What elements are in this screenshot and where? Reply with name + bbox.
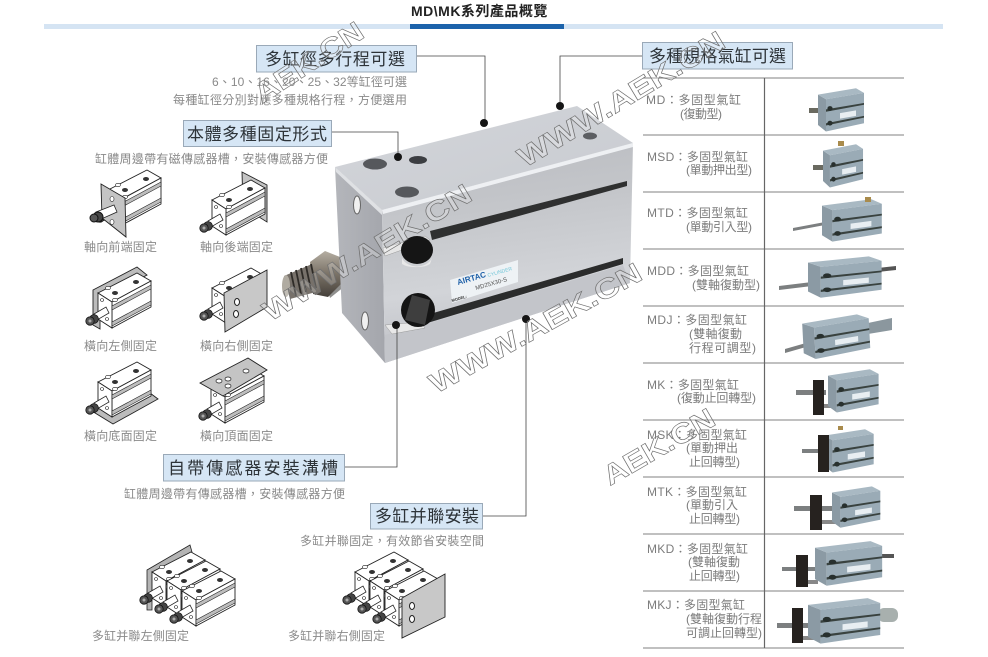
row: MKJ: 可調止回轉型): [686, 626, 762, 640]
row: MDD: MDD：多固型氣缸: [647, 263, 749, 278]
watermark: WWW.AEK.CN upper right: WWW.AEK.CN: [512, 25, 730, 173]
row: MD: (復動型): [680, 107, 722, 121]
row: MSK: 止回轉型): [689, 455, 740, 469]
mount: lateral right: [200, 268, 273, 353]
mount: parallel left: 多缸并聯左側固定: [92, 628, 189, 643]
text: bore sizes: 每種缸徑分別對應多種規格行程，方便選用: [173, 92, 407, 107]
row: MD: MD：多固型氣缸: [646, 92, 741, 107]
row: MKD: [647, 541, 894, 587]
row: MTD: (單動引入型): [686, 220, 752, 234]
callout: parallel mounting: 多缸并聯安裝: [375, 506, 479, 526]
header: title and rule: [44, 3, 943, 29]
callout: parallel mounting: [370, 315, 530, 529]
mount: axial rear: [200, 172, 273, 254]
ports on top: [354, 132, 597, 330]
mount: axial front: [84, 170, 161, 254]
row: MKD: MKD：多固型氣缸: [647, 541, 748, 556]
callout: sensor grooves: [164, 321, 400, 481]
row: MDJ: (雙軸復動: [689, 327, 742, 341]
row: MSK: MSK：多固型氣缸: [647, 427, 747, 442]
row: MSK: (單動押出: [686, 441, 738, 455]
row: MDJ: 行程可調型): [689, 341, 756, 355]
row: MTK: 止回轉型): [689, 512, 740, 526]
callout: multiple specifications: [556, 42, 792, 110]
row: MKJ: MKJ：多固型氣缸: [647, 597, 745, 612]
callout: multi bore and stroke: [256, 46, 488, 127]
cylinder body: [335, 167, 385, 363]
row: MSK: [647, 426, 874, 472]
callout: mounting forms: 本體多種固定形式: [187, 125, 327, 144]
watermark: WWW.AEK.CN center left: WWW.AEK.CN: [257, 178, 477, 327]
model nameplate: AIRTAC: [456, 270, 487, 287]
mount: lateral bottom: 橫向底面固定: [84, 428, 157, 443]
watermark: WWW.AEK.CN lower: WWW.AEK.CN: [424, 257, 647, 399]
row: MTK: (單動引入: [686, 498, 738, 512]
callout: mounting forms: [184, 120, 402, 161]
mount: parallel left: [92, 545, 235, 643]
row: MSD: [647, 141, 863, 187]
rod and fitting: [282, 245, 372, 299]
callout: multi bore and stroke: 多缸徑多行程可選: [265, 49, 405, 69]
mount: lateral top: 橫向頂面固定: [200, 428, 273, 443]
row: MKD: 止回轉型): [689, 569, 740, 583]
mount: parallel right: [288, 552, 445, 643]
text: sensor description: 缸體周邊帶有傳感器槽，安裝傳感器方便: [124, 486, 345, 501]
model nameplate: MODEL:: [451, 294, 467, 303]
watermark: AEK.CN lower right: AEK.CN: [598, 402, 720, 491]
row: MKJ: [647, 597, 898, 644]
text: parallel description: 多缸并聯固定，有效節省安裝空間: [300, 533, 484, 548]
row: MDD: (雙軸復動型): [692, 278, 760, 292]
mount: lateral left: 橫向左側固定: [84, 338, 157, 353]
product table: [643, 78, 904, 648]
model nameplate: MD25X30-S: [475, 277, 508, 292]
callout: multiple specifications: 多種規格氣缸可選: [649, 46, 786, 66]
row: MTD: MTD：多固型氣缸: [647, 205, 748, 220]
row: MDJ: [647, 312, 892, 360]
row: MDD: [647, 256, 896, 298]
row: MKJ: (雙軸復動行程: [686, 612, 762, 626]
row: MK: [647, 369, 879, 415]
mount: parallel right: 多缸并聯右側固定: [288, 628, 385, 643]
watermark: AEK.CN top: AEK.CN: [248, 15, 369, 109]
mount: axial front: 軸向前端固定: [84, 239, 157, 254]
mount: axial rear: 軸向後端固定: [200, 239, 273, 254]
row: MSD: MSD：多固型氣缸: [647, 149, 748, 164]
row: MTK: [647, 484, 880, 530]
text: bore sizes: 6、10、16、20、25、32等缸徑可選: [212, 74, 407, 89]
sensor grooves: [383, 181, 627, 334]
row: MDJ: MDJ：多固型氣缸: [647, 312, 747, 327]
mount: lateral top: [199, 358, 273, 443]
row: MK: (復動止回轉型): [677, 391, 756, 405]
mount: lateral right: 橫向右側固定: [200, 338, 273, 353]
header: title and rule: MD\MK系列產品概覽: [411, 3, 548, 19]
row: MD: [646, 88, 864, 131]
mount: lateral left: [84, 267, 157, 353]
callout: sensor grooves: 自帶傳感器安裝溝槽: [168, 458, 338, 478]
text: mounting description: 缸體周邊帶有磁傳感器槽，安裝傳感器方便: [95, 151, 328, 166]
row: MTD: [647, 197, 882, 242]
mount: lateral bottom: [84, 362, 158, 443]
main cylinder illustration: [282, 106, 633, 363]
text: bore sizes: [173, 74, 407, 107]
model nameplate: CYLINDER: [487, 266, 513, 279]
row: MTK: MTK：多固型氣缸: [647, 484, 747, 499]
model nameplate: [450, 260, 518, 303]
row: MK: MK：多固型氣缸: [647, 377, 739, 392]
row: MKD: (雙軸復動: [688, 555, 740, 569]
row: MSD: (單動押出型): [686, 163, 752, 177]
